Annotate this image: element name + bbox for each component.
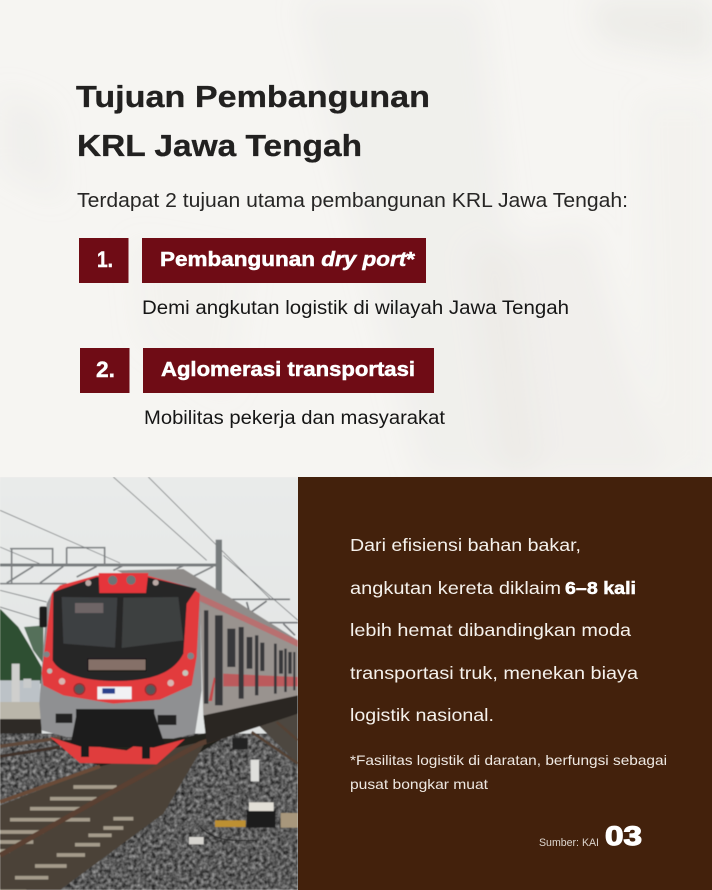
ground and gravel (0, 714, 298, 890)
goal 2 heading: Aglomerasi transportasi (161, 359, 415, 381)
goal 1 heading (142, 238, 426, 283)
goal 1 (79, 238, 569, 319)
trackside equipment (189, 738, 298, 844)
number badge 1 (79, 238, 128, 283)
number badge 2: 2. (96, 357, 115, 382)
lights (74, 684, 85, 694)
number badge 1: 1. (97, 247, 113, 272)
gantry pole (216, 540, 222, 596)
page number: 03 (605, 821, 642, 851)
overhead wires and gantry (0, 477, 298, 635)
main paragraph: angkutan kereta diklaim (350, 578, 561, 598)
shadow under train (52, 732, 222, 767)
number badge 2 (80, 348, 130, 393)
source: Sumber: KAI (539, 837, 599, 849)
main paragraph: lebih hemat dibandingkan moda (350, 620, 631, 640)
footnote: pusat bongkar muat (350, 776, 488, 792)
brown info panel (298, 477, 712, 890)
main paragraph: transportasi truk, menekan biaya (350, 663, 638, 683)
mirror (39, 606, 47, 627)
goal 1 heading: Pembangunan dry port * (160, 249, 415, 271)
trees (0, 609, 42, 684)
main paragraph: Dari efisiensi bahan bakar, (350, 535, 581, 555)
main paragraph: 6–8 kali (565, 578, 636, 598)
footnote: *Fasilitas logistik di daratan, berfungsi sebagai (350, 752, 667, 768)
destination display (88, 659, 146, 671)
goal 2 heading (143, 348, 434, 393)
windshield (62, 597, 117, 648)
train front (39, 573, 202, 764)
title: KRL Jawa Tengah (77, 128, 362, 163)
rail tracks (0, 722, 298, 890)
main paragraph: logistik nasional. (350, 705, 494, 725)
goal 1 description: Demi angkutan logistik di wilayah Jawa Tengah (142, 298, 569, 319)
footnote (350, 752, 667, 792)
roof red panel (99, 573, 148, 593)
KAI logo plate (97, 687, 132, 699)
station platform (0, 664, 42, 736)
intro text: Terdapat 2 tujuan utama pembangunan KRL Jawa Tengah: (77, 190, 628, 212)
train side (117, 569, 298, 744)
goal 2 description: Mobilitas pekerja dan masyarakat (144, 408, 446, 429)
title: Tujuan Pembangunan (76, 79, 430, 114)
title (76, 79, 430, 163)
goal 2 (80, 348, 446, 429)
coupler and lower front (70, 709, 167, 747)
main paragraph (350, 535, 638, 725)
photo: KRL train (0, 477, 300, 890)
paper texture background (0, 0, 712, 477)
